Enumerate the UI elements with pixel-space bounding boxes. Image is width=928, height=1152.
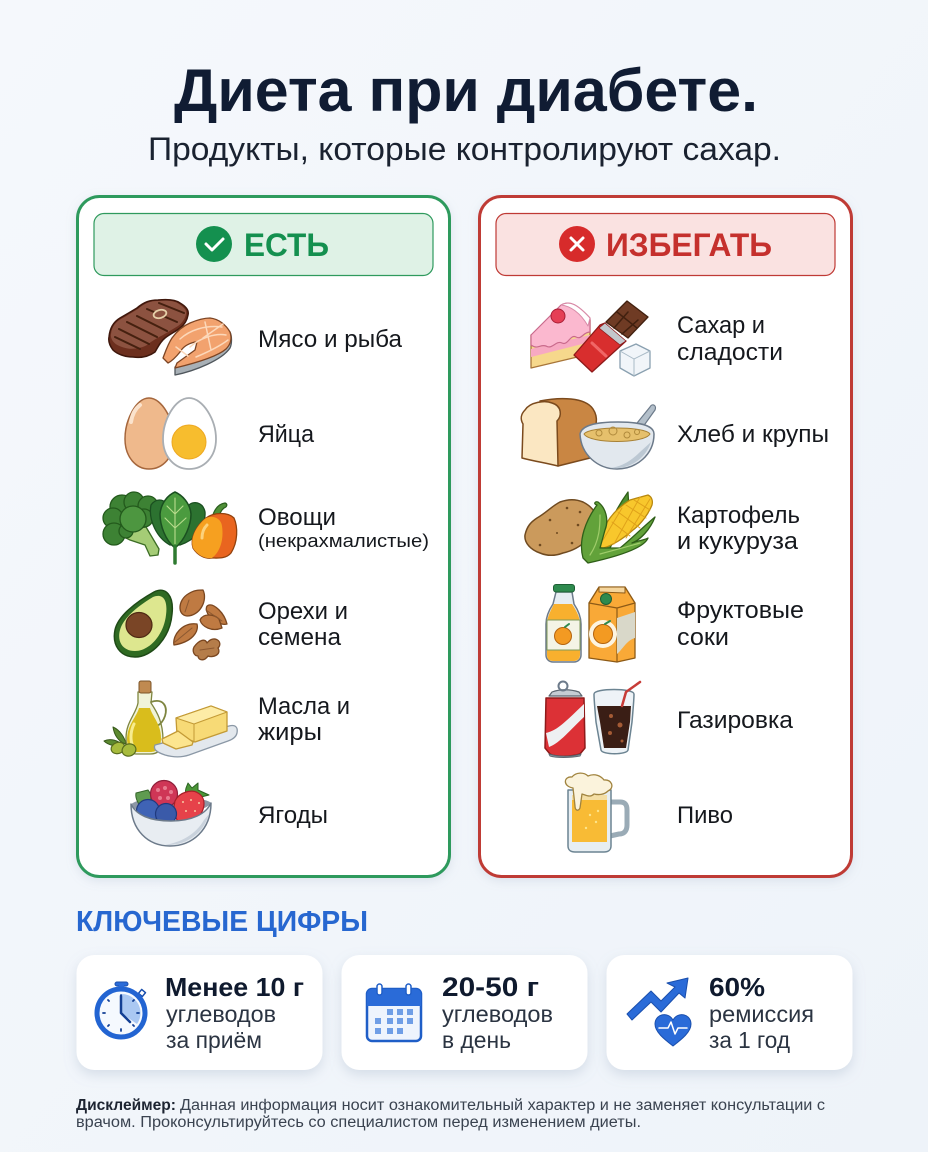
item: nuts	[114, 590, 348, 660]
item: oils: Масла и	[258, 693, 350, 720]
disclaimer: врачом. Проконсультируйтесь со специалистом перед изменением диеты.	[76, 1114, 641, 1131]
icon: beer mug	[565, 773, 627, 852]
item: bread and grains: Хлеб и крупы	[677, 421, 829, 448]
item: meat and fish	[109, 300, 403, 375]
item: potato and corn: и кукуруза	[677, 528, 799, 555]
panel: eat	[78, 196, 450, 876]
avoid header	[496, 214, 835, 276]
stat card: under 10 g: углеводов	[166, 1001, 276, 1027]
item: fruit juices: Фруктовые	[677, 597, 804, 624]
item: sugar and sweets: Сахар и	[677, 312, 765, 339]
icon: rising arrow and heart	[627, 978, 691, 1046]
disclaimer: Данная информация носит ознакомительный характер и не заменяет консультации с	[180, 1097, 825, 1114]
item: bread and grains	[521, 399, 829, 469]
stat card: 20-50 g: в день	[442, 1027, 511, 1053]
icon: berry bowl	[131, 780, 211, 846]
item: beer: Пиво	[677, 802, 733, 829]
item: fruit juices	[546, 584, 804, 662]
icon: calendar	[367, 984, 421, 1041]
stat card: 20-50 g: углеводов	[442, 1001, 553, 1027]
item: meat and fish: Мясо и рыба	[258, 326, 403, 353]
icon: eggs	[125, 398, 216, 469]
item: sugar and sweets	[531, 301, 783, 376]
icon: soda can and glass	[545, 682, 640, 758]
item: potato and corn: Картофель	[677, 502, 800, 529]
stat card: under 10 g	[76, 955, 322, 1070]
icon: avocado and nuts	[114, 590, 227, 660]
panel: avoid	[480, 196, 852, 876]
item: oils: жиры	[258, 719, 322, 746]
item: eggs: Яйца	[258, 421, 315, 448]
item: eggs	[125, 398, 315, 469]
icon: juice bottle and carton	[546, 584, 635, 662]
item: berries	[131, 780, 328, 846]
stat card: 60%: за 1 год	[709, 1027, 791, 1053]
subtitle: Продукты, которые контролируют сахар.	[148, 131, 781, 167]
section heading: key numbers: КЛЮЧЕВЫЕ ЦИФРЫ	[76, 906, 368, 938]
stat card: under 10 g: Менее 10 г	[165, 972, 304, 1002]
icon: broccoli, spinach, pepper	[103, 492, 237, 563]
item: soda	[545, 682, 794, 758]
item: nuts: семена	[258, 624, 342, 651]
stat card: 60%: ремиссия	[709, 1001, 814, 1027]
icon: cake, chocolate, sugar cube	[531, 301, 650, 376]
icon: cross	[559, 226, 595, 262]
item: potato and corn	[525, 492, 800, 563]
item: soda: Газировка	[677, 707, 794, 734]
item: vegetables: (некрахмалистые)	[258, 531, 429, 551]
stat card: 20-50 g	[342, 955, 588, 1070]
item: vegetables	[103, 492, 429, 563]
icon: steak and salmon	[109, 300, 232, 375]
item: fruit juices: соки	[677, 624, 729, 651]
stat card: under 10 g: за приём	[166, 1027, 262, 1053]
stat card: 60%	[606, 955, 852, 1070]
eat heading: ЕСТЬ	[244, 227, 329, 263]
item: berries: Ягоды	[258, 802, 328, 829]
icon: potato and corn	[525, 492, 655, 563]
item: sugar and sweets: сладости	[677, 339, 783, 366]
item: vegetables: Овощи	[258, 504, 336, 531]
disclaimer	[76, 1097, 825, 1131]
icon: stopwatch	[97, 982, 146, 1037]
stat card: 20-50 g: 20-50 г	[442, 972, 539, 1002]
title: Диета при диабете.	[174, 57, 758, 124]
item: oils	[104, 681, 350, 758]
disclaimer: Дисклеймер:	[76, 1097, 176, 1114]
icon: bread and porridge bowl	[521, 399, 655, 469]
stat card: 60%: 60%	[709, 972, 765, 1002]
item: beer	[565, 773, 733, 852]
item: nuts: Орехи и	[258, 598, 348, 625]
avoid heading: ИЗБЕГАТЬ	[606, 227, 772, 263]
eat header	[94, 214, 433, 276]
icon: check	[196, 226, 232, 262]
icon: oil bottle and butter	[104, 681, 237, 758]
